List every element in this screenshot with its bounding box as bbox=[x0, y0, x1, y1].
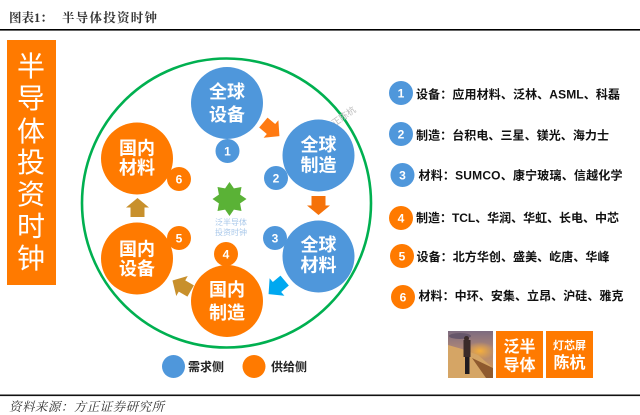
badge 5: 5 bbox=[176, 232, 183, 246]
list item 5: 5 bbox=[399, 250, 406, 264]
author tile: 陈杭: 陈杭 bbox=[553, 353, 586, 372]
panel: vertical heading: 体 bbox=[17, 116, 45, 147]
badge 4 bbox=[214, 242, 238, 266]
list item 3 bbox=[390, 163, 622, 187]
panel: vertical heading: 钟 bbox=[17, 243, 45, 274]
node: domestic equipment: 设备 bbox=[119, 259, 155, 279]
list item 4: 制造：TCL、华润、华虹、长电、中芯 bbox=[416, 210, 619, 225]
author tile: 泛半导体: 导体 bbox=[503, 356, 536, 374]
arrow: 2 to 3 bbox=[307, 196, 330, 215]
list item 4 bbox=[389, 206, 619, 230]
node: domestic materials bbox=[101, 122, 173, 194]
list item 1: 设备：应用材料、泛林、ASML、科磊 bbox=[416, 86, 620, 102]
list item 2: 制造：台积电、三星、镁光、海力士 bbox=[416, 128, 609, 142]
badge 3: 3 bbox=[272, 232, 279, 246]
node: global manufacturing: 全球 bbox=[300, 134, 336, 155]
watermark: author tag: 方正陈杭 bbox=[322, 104, 358, 133]
node: global manufacturing bbox=[282, 120, 354, 192]
badge 1: 1 bbox=[224, 144, 231, 158]
source note: 资料来源：方正证券研究所 bbox=[9, 400, 166, 414]
title: 图表1： bbox=[9, 10, 53, 25]
list item 3: 3 bbox=[399, 168, 406, 182]
arrow: 1 to 2 bbox=[256, 114, 287, 145]
arrow: 4 to 5 bbox=[167, 271, 196, 301]
badge 5 bbox=[167, 226, 191, 250]
node: global equipment: 全球 bbox=[209, 81, 245, 102]
list item 6 bbox=[391, 285, 624, 309]
list item 1 bbox=[389, 81, 620, 105]
list item 2 bbox=[389, 122, 609, 146]
node: global manufacturing: 制造 bbox=[300, 156, 336, 176]
watermark text: 泛半导体 bbox=[215, 217, 247, 227]
author tile: 泛半导体 bbox=[496, 331, 543, 378]
list item 6: 6 bbox=[400, 290, 407, 304]
author tile: 泛半导体: 泛半 bbox=[503, 338, 536, 356]
node: domestic equipment: 国内 bbox=[119, 240, 155, 260]
list item 2: 2 bbox=[398, 128, 405, 142]
legend: 供给侧 bbox=[271, 359, 307, 374]
panel: vertical heading bbox=[7, 40, 56, 285]
badge 3 bbox=[263, 226, 287, 250]
panel: vertical heading: 导 bbox=[17, 83, 45, 114]
node: domestic manufacturing: 国内 bbox=[209, 280, 245, 300]
author tile: 陈杭 bbox=[546, 331, 593, 378]
list item 3: 材料：SUMCO、康宁玻璃、信越化学 bbox=[418, 168, 622, 182]
node: global equipment bbox=[191, 67, 263, 139]
watermark text bbox=[215, 217, 247, 237]
list item 4: 4 bbox=[398, 212, 405, 226]
watermark text: 投资时钟 bbox=[215, 227, 247, 237]
node: global equipment: 设备 bbox=[209, 105, 245, 125]
badge 6: 6 bbox=[176, 172, 183, 186]
icon: green star bbox=[212, 182, 246, 216]
legend: 需求侧 bbox=[188, 359, 224, 374]
legend bbox=[162, 355, 307, 378]
list item 1: 1 bbox=[398, 86, 405, 100]
node: global materials bbox=[282, 220, 354, 292]
list item 5 bbox=[390, 244, 610, 268]
badge 6 bbox=[167, 167, 191, 191]
title: 半导体投资时钟 bbox=[62, 10, 157, 25]
panel: vertical heading: 投 bbox=[17, 147, 45, 178]
author tile: 陈杭: 灯芯屏 bbox=[553, 338, 586, 352]
arrow: 5 to 6 bbox=[126, 198, 149, 217]
panel: vertical heading: 资 bbox=[17, 179, 45, 210]
badge 1 bbox=[216, 139, 240, 163]
node: global materials: 全球 bbox=[300, 234, 336, 255]
panel: vertical heading: 半 bbox=[17, 51, 45, 82]
clock ring bbox=[82, 58, 371, 348]
node: domestic materials: 材料 bbox=[119, 158, 155, 178]
node: global materials: 材料 bbox=[300, 256, 336, 276]
node: domestic manufacturing: 制造 bbox=[209, 303, 245, 323]
list item 5: 设备：北方华创、盛美、屹唐、华峰 bbox=[416, 249, 610, 264]
arrow: 3 to 4 bbox=[261, 272, 292, 303]
node: domestic equipment bbox=[101, 222, 173, 294]
author photo bbox=[448, 331, 495, 378]
node: domestic manufacturing bbox=[191, 265, 263, 337]
badge 2: 2 bbox=[273, 172, 280, 186]
panel: vertical heading: 时 bbox=[17, 211, 45, 242]
badge 2 bbox=[264, 166, 288, 190]
badge 4: 4 bbox=[223, 248, 230, 262]
node: domestic materials: 国内 bbox=[119, 138, 155, 158]
list item 6: 材料：中环、安集、立昂、沪硅、雅克 bbox=[418, 288, 624, 303]
